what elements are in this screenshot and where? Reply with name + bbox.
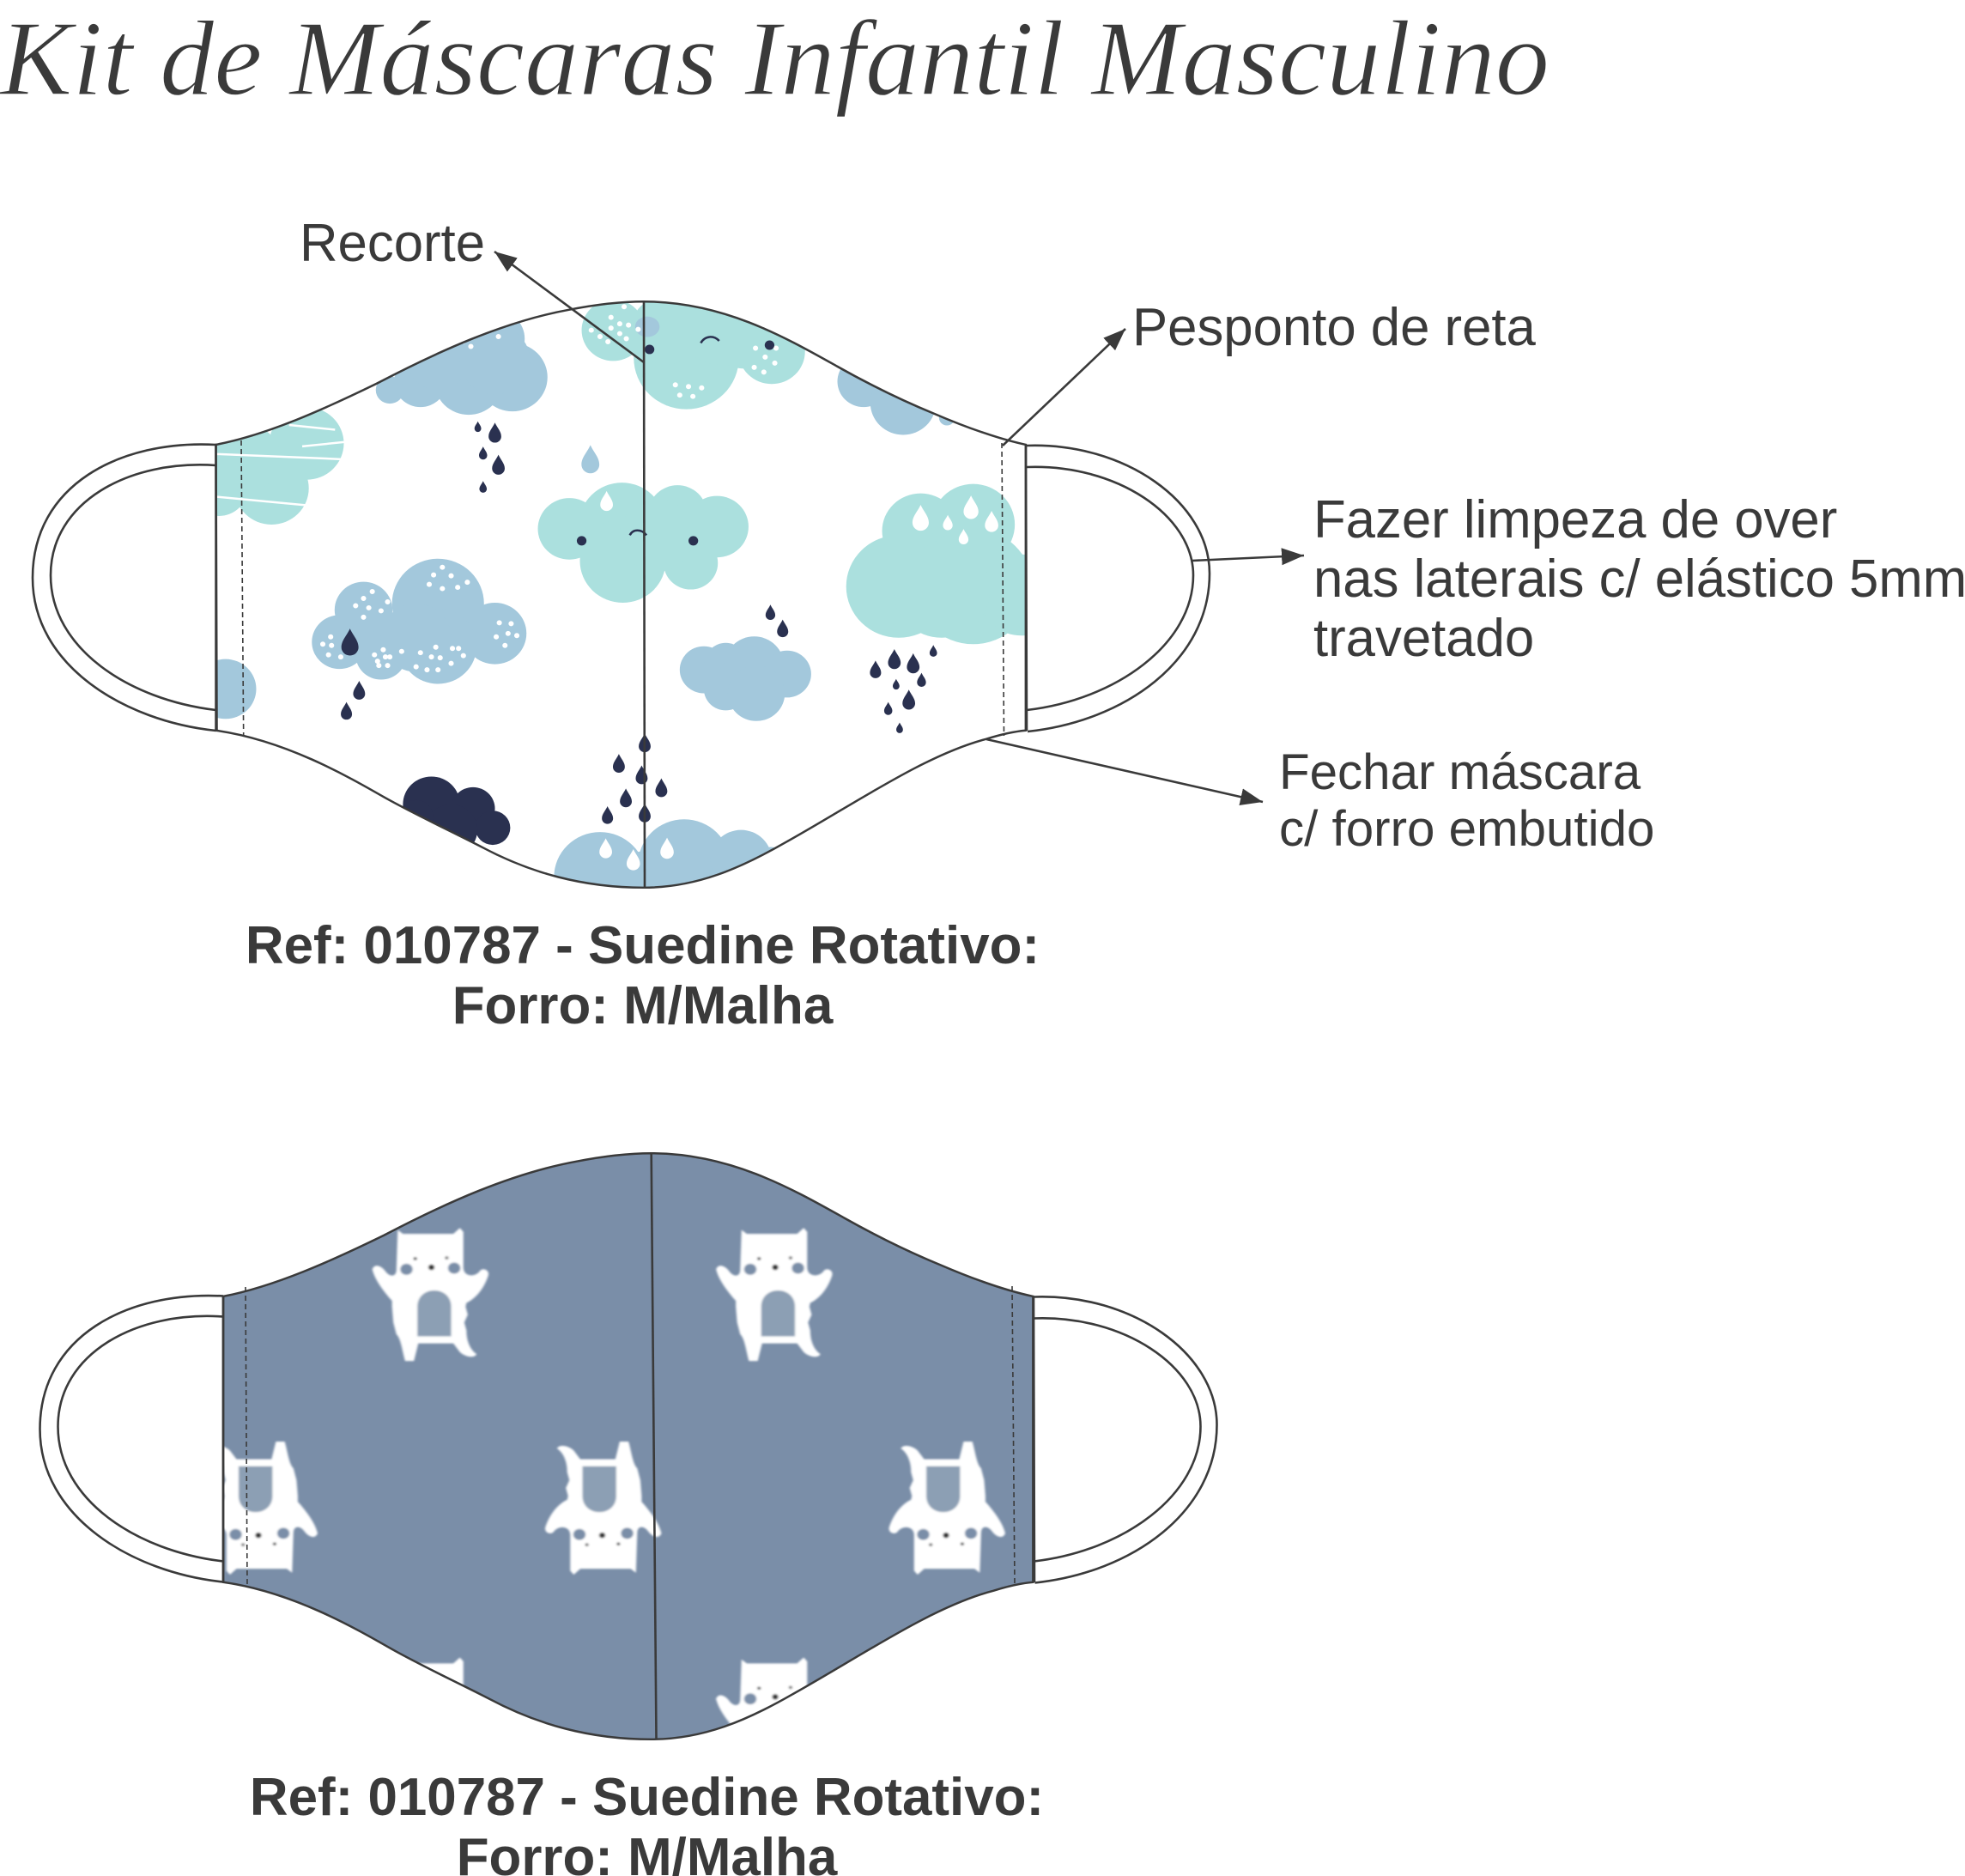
centre seam [644, 301, 645, 888]
elastic loops [39, 1296, 1217, 1583]
callout: Pesponto de reta [1003, 298, 1537, 446]
callout: limpeza de over [1192, 490, 1965, 668]
bear fabric print [224, 1154, 1032, 1739]
callout: fechar máscara: Fechar máscara [1279, 744, 1641, 800]
cloud fabric print [216, 302, 1025, 887]
side stitching [216, 440, 1027, 736]
callout: limpeza de over: nas laterais c/ elástico 5mm [1313, 549, 1965, 609]
title: Kit de Máscaras Infantil Masculino [0, 0, 1550, 118]
callout: Recorte: Recorte [300, 214, 485, 273]
centre seam [652, 1153, 656, 1739]
mask outline [216, 301, 1026, 888]
side stitching [223, 1286, 1034, 1587]
callout: Recorte [300, 214, 644, 362]
callout: fechar máscara [986, 739, 1654, 857]
caption 2 [250, 1768, 1044, 1876]
callout: fechar máscara: c/ forro embutido [1279, 801, 1654, 857]
caption 1 [246, 916, 1040, 1035]
caption 1: Forro: M/Malha [452, 976, 834, 1035]
mask outline [223, 1153, 1033, 1739]
callout: limpeza de over: Fazer limpeza de over [1313, 490, 1837, 549]
caption 1: Ref: 010787 - Suedine Rotativo: [246, 916, 1040, 975]
mask 2: bear print [39, 1142, 1217, 1791]
elastic loops [33, 445, 1210, 732]
caption 2: Ref: 010787 - Suedine Rotativo: [250, 1768, 1044, 1827]
mask 1: cloud print [33, 279, 1210, 922]
callout: Pesponto de reta: Pesponto de reta [1132, 298, 1537, 357]
callout: limpeza de over: travetado [1313, 609, 1534, 668]
